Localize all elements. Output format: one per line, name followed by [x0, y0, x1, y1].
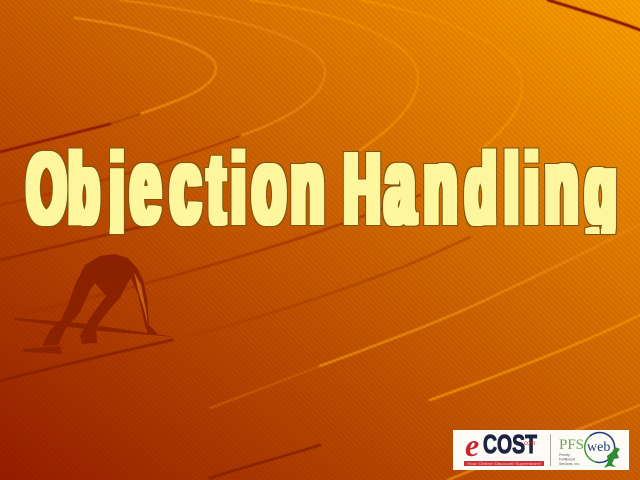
title: j [109, 132, 124, 245]
title: ti [208, 132, 245, 245]
logo panel [453, 427, 629, 470]
divider [550, 434, 551, 466]
title: on [252, 127, 324, 247]
title: H [344, 132, 380, 245]
title: dli [466, 132, 538, 245]
title: Ob [27, 132, 99, 245]
icon: sprinter in starting blocks [15, 254, 175, 354]
pfsweb logo [559, 432, 620, 468]
pfsweb logo: Fulfillment [559, 458, 575, 462]
title: n [545, 127, 578, 247]
ecost logo: Your Online Discount Superstore! [467, 461, 541, 466]
pfsweb logo: Services, Inc. [559, 462, 580, 466]
title [24, 148, 618, 235]
title: ec [130, 127, 201, 247]
ecost logo [464, 427, 544, 466]
pfsweb logo: web [587, 440, 610, 455]
pfsweb logo: PFS [559, 437, 584, 453]
ecost logo: com [524, 441, 535, 447]
title: an [385, 127, 457, 247]
pfsweb logo: Priority [559, 453, 570, 457]
ecost logo: COST [483, 429, 537, 459]
title: g [586, 132, 616, 245]
ecost logo: e [465, 427, 479, 463]
